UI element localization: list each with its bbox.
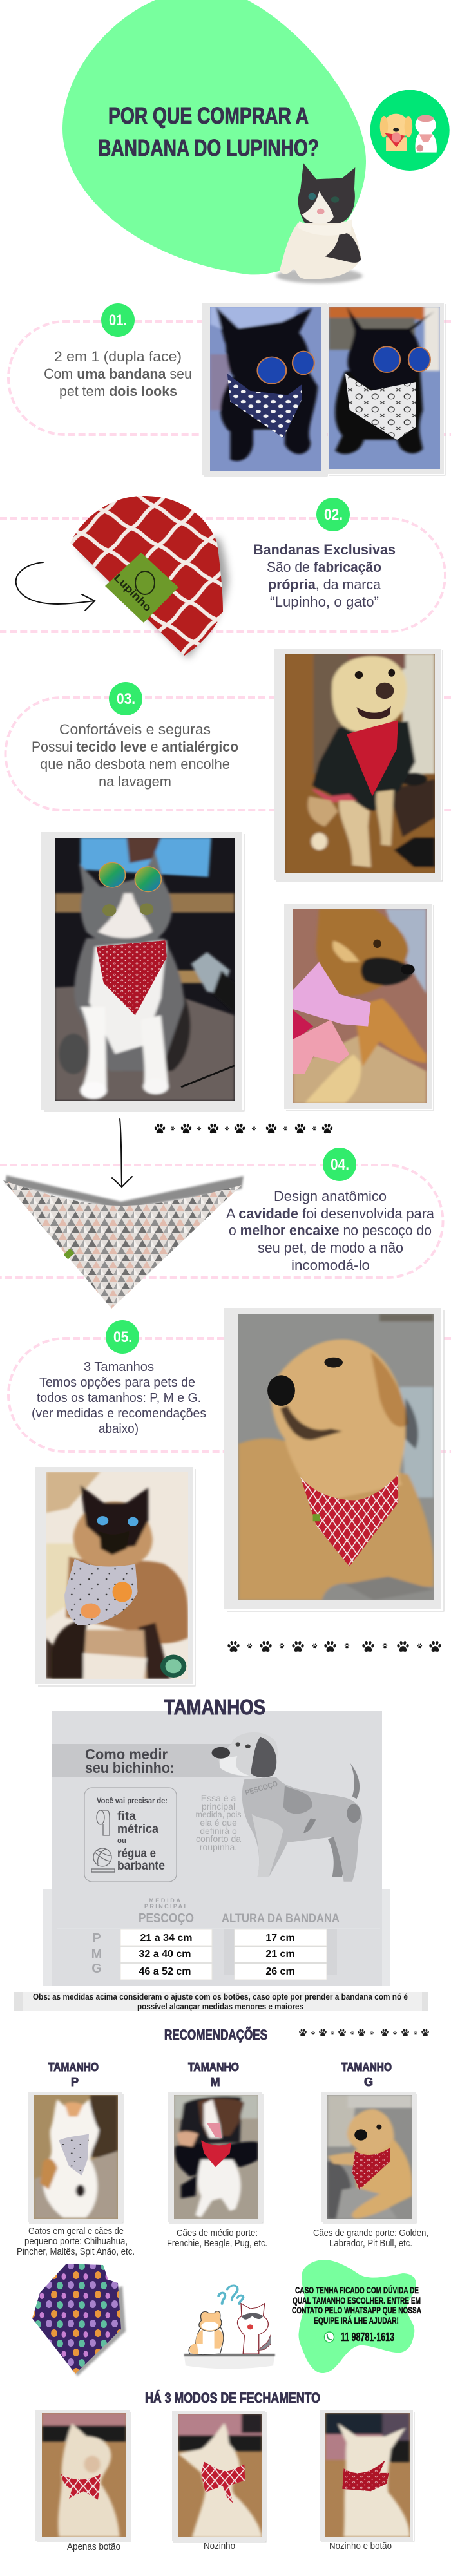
box: supplies: régua e (117, 1847, 156, 1861)
heading M: TAMANHO (188, 2061, 239, 2074)
table: sizes: PESCOÇO (139, 1911, 194, 1926)
note: observation bar: Obs: as medidas acima consideram o ajuste com os botões, caso opte por prender a bandana com nó é (33, 1992, 408, 2002)
heading G (341, 2061, 392, 2088)
text 02: “Lupinho, o gato” (270, 594, 379, 610)
cat photo cut-out (276, 163, 362, 283)
text 03: Possui tecido leve e antialérgico (32, 739, 238, 755)
text 03 (32, 721, 238, 790)
panel: section 02 (0, 498, 445, 632)
photo frame: golden retriever (224, 1308, 444, 1611)
caption P: Gatos em geral e cães de (28, 2226, 124, 2237)
panel: section 04 (0, 1148, 443, 1278)
title: BANDANA DO LUPINHO? (98, 135, 319, 161)
box: supplies: métrica (117, 1823, 158, 1836)
panel: section 01 (8, 303, 451, 435)
badge 04: 04. (331, 1156, 349, 1173)
box: supplies: fita (117, 1810, 136, 1823)
note: neck measure: roupinha. (200, 1842, 237, 1852)
photo frame: dog with pink bandana (284, 904, 434, 1110)
icon: whatsapp (325, 2332, 334, 2342)
caption M (167, 2228, 267, 2249)
heading: recomendações: RECOMENDAÇÕES (164, 2027, 267, 2043)
table: sizes: M (91, 1947, 102, 1962)
photo frame: dog black jacket (274, 649, 443, 881)
note: neck measure: principal (202, 1801, 235, 1812)
note: neck measure: medida, pois (196, 1809, 241, 1819)
caption P (17, 2226, 135, 2257)
table: sizes: 32 a 40 cm (139, 1949, 191, 1960)
gray triangle-print bandana (3, 1175, 244, 1309)
caption: nozinho: Nozinho (204, 2541, 235, 2552)
title (98, 102, 319, 161)
text 03: na lavagem (99, 773, 171, 790)
green blob: whatsapp call-to-action (298, 2260, 416, 2373)
text 04: incomodá-lo (291, 1257, 370, 1273)
table: sizes (57, 1897, 380, 1980)
title: POR QUE COMPRAR A (108, 102, 309, 129)
heading P (48, 2061, 99, 2088)
panel: section 03 (5, 682, 451, 810)
text 05: 3 Tamanhos (84, 1360, 154, 1374)
text 03: Confortáveis e seguras (59, 721, 211, 737)
text 01 (44, 348, 192, 399)
photo frame: black cat white bandana (328, 303, 445, 475)
heading P: TAMANHO (48, 2061, 99, 2074)
note: neck measure: Essa é a (201, 1793, 236, 1803)
photo frame: button only (35, 2410, 131, 2541)
table: sizes: 17 cm (265, 1933, 295, 1944)
logo: dog and cat on green circle (370, 90, 450, 171)
icon: yarn ball and ruler (91, 1848, 115, 1872)
caption P: pequeno porte: Chihuahua, (24, 2236, 128, 2247)
badge 05: 05. (113, 1329, 132, 1346)
text 02: própria, da marca (268, 576, 381, 592)
photo frame: knot and button (320, 2410, 414, 2541)
panel: how to measure (43, 1711, 390, 1986)
arrow: curved to bandana (16, 562, 95, 611)
text 05 (32, 1360, 206, 1436)
note: observation bar (14, 1992, 428, 2011)
woven tag (105, 553, 178, 623)
table: sizes: 21 a 34 cm (140, 1933, 192, 1944)
heading P: P (71, 2076, 79, 2088)
caption: nozinho e botão: Nozinho e botão (329, 2541, 392, 2552)
heading M: M (210, 2076, 220, 2088)
caption M: Cães de médio porte: (177, 2228, 258, 2239)
text 01: 2 em 1 (dupla face) (54, 348, 182, 365)
text 01: Com uma bandana seu (44, 366, 192, 382)
box: supplies: Você vai precisar de: (97, 1796, 168, 1805)
paw row 1 (154, 1124, 333, 1133)
caption G: Labrador, Pit Bull, etc. (329, 2238, 412, 2249)
text 04 (226, 1188, 435, 1273)
woven tag: Lupinho (111, 571, 154, 614)
box: supplies (84, 1788, 177, 1882)
illustration: dog (212, 1732, 362, 1882)
caption G: Cães de grande porte: Golden, (313, 2228, 428, 2239)
text 03: que não desbota nem encolhe (40, 756, 230, 772)
heading G: G (364, 2076, 373, 2088)
table: sizes: P (92, 1931, 101, 1946)
caption M: Frenchie, Beagle, Pug, etc. (167, 2238, 267, 2249)
panel: section 05 (8, 1320, 451, 1452)
icon: measuring tape (97, 1810, 110, 1835)
text 05: todos os tamanhos: P, M e G. (37, 1391, 201, 1405)
table: sizes: 26 cm (265, 1966, 295, 1977)
caption P: Pincher, Maltês, Spit Anão, etc. (17, 2246, 135, 2257)
photo frame: golden on sofa (321, 2092, 416, 2223)
paw row 2 (227, 1641, 441, 1652)
text 02: Bandanas Exclusivas (253, 542, 396, 558)
text 05: abaixo) (99, 1422, 139, 1436)
text 04: seu pet, de modo a não (258, 1240, 403, 1256)
heading: tamanhos: TAMANHOS (164, 1695, 265, 1719)
title blob (62, 0, 366, 274)
caption: apenas botão: Apenas botão (67, 2541, 120, 2552)
photo frame: gray cat with sunglasses (41, 832, 244, 1111)
note: neck measure (196, 1793, 241, 1852)
photo frame: calico cat (28, 2092, 123, 2223)
table: sizes: ALTURA DA BANDANA (222, 1912, 340, 1926)
heading M (188, 2061, 239, 2088)
photo frame: black cat navy bandana (202, 303, 327, 476)
badge 04 (323, 1148, 356, 1181)
photo frame: siamese cat (35, 1467, 195, 1686)
box: supplies: barbante (117, 1859, 165, 1873)
call-to-action text: EQUIPE IRÁ LHE AJUDAR! (314, 2315, 399, 2325)
badge 02: 02. (324, 506, 343, 524)
text 04: A cavidade foi desenvolvida para (226, 1206, 435, 1222)
badge 01: 01. (109, 312, 127, 329)
heading: como medir (85, 1746, 175, 1776)
call-to-action text (292, 2284, 421, 2325)
table: sizes: 21 cm (265, 1949, 295, 1960)
text 04: o melhor encaixe no pescoço do (229, 1222, 432, 1238)
photo frame: border collie (168, 2092, 263, 2223)
text 02 (253, 542, 396, 610)
heading: como medir: Como medir (85, 1746, 168, 1763)
table: sizes: PRINCIPAL (144, 1903, 188, 1909)
caption G (313, 2228, 428, 2249)
text 01: pet tem dois looks (59, 383, 177, 399)
neck label: PESCOÇO (244, 1779, 279, 1797)
column: size P (17, 2061, 135, 2257)
heading: como medir: seu bichinho: (85, 1759, 175, 1776)
badge 03 (109, 682, 142, 715)
text 04: Design anatômico (274, 1188, 387, 1204)
text 05: (ver medidas e recomendações (32, 1406, 206, 1421)
badge 02 (316, 498, 350, 531)
purple bandana (32, 2264, 126, 2376)
note: neck measure: conforto da (196, 1833, 241, 1844)
whatsapp number: 11 98781-1613 (341, 2331, 394, 2344)
note: neck measure: definirá o (200, 1826, 237, 1836)
arrow: down to bandana (112, 1119, 132, 1187)
table: sizes: 46 a 52 cm (139, 1966, 191, 1977)
text 02: São de fabricação (267, 559, 381, 575)
column: size M (167, 2061, 267, 2249)
box: supplies: ou (117, 1835, 126, 1845)
text 05: Temos opções para pets de (39, 1376, 195, 1390)
note: observation bar: possível alcançar medidas menores e maiores (137, 2002, 303, 2011)
badge 01 (101, 303, 135, 337)
red bandana with Lupinho tag (70, 496, 228, 658)
photo frame: knot (172, 2411, 266, 2542)
illustration: confused cat and husky (184, 2286, 275, 2369)
note: neck measure: ela é que (200, 1817, 237, 1828)
heading: closing modes: HÁ 3 MODOS DE FECHAMENTO (145, 2390, 320, 2406)
badge 03: 03. (117, 690, 135, 708)
badge 05 (106, 1320, 139, 1354)
heading G: TAMANHO (341, 2061, 392, 2074)
table: sizes: MEDIDA (149, 1897, 180, 1904)
table: sizes: G (91, 1962, 102, 1976)
paw row 3 (299, 2029, 429, 2036)
column: size G (313, 2061, 428, 2249)
